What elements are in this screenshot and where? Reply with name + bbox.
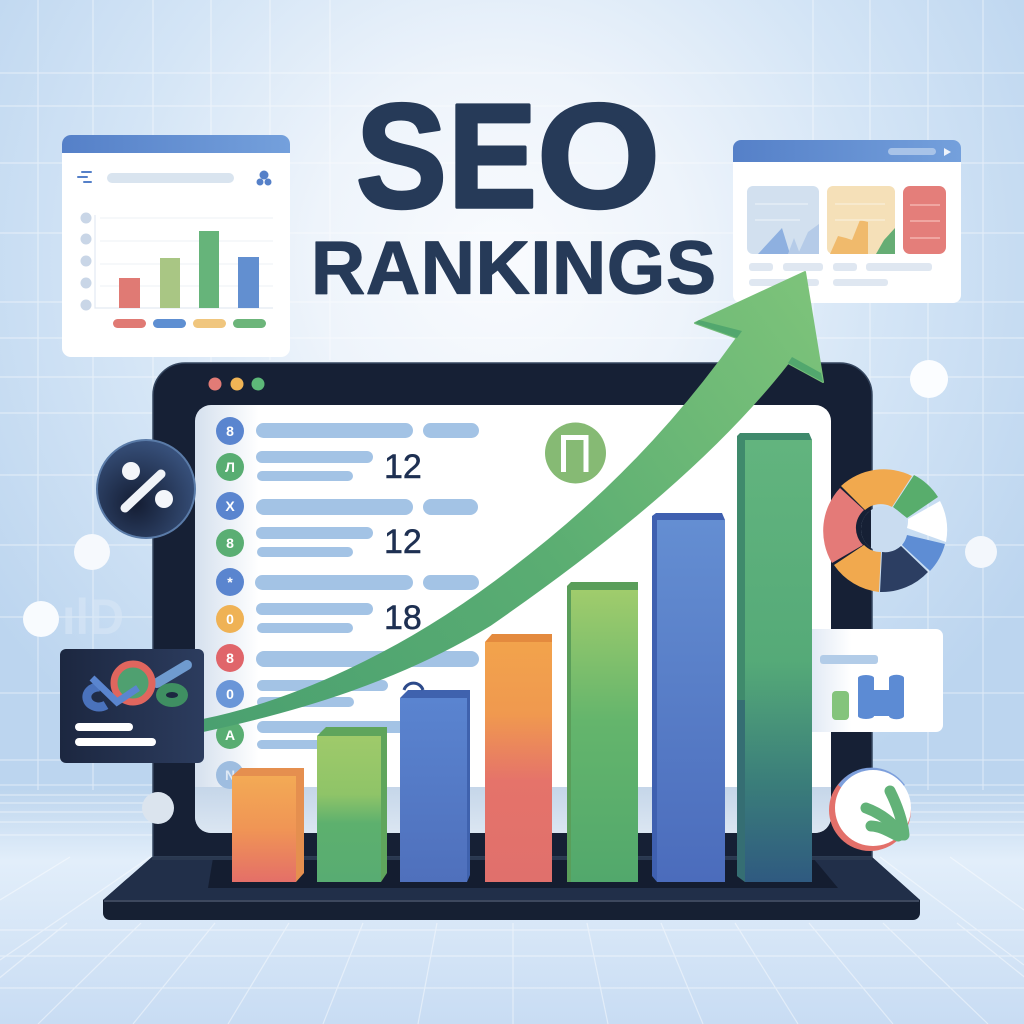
rank numbers: 12 (384, 523, 422, 561)
rank badges: 8 (226, 650, 234, 666)
chart card: red (903, 186, 946, 254)
rank badges: N (225, 767, 235, 783)
icon: green check circle (829, 768, 911, 851)
column 3 (400, 683, 470, 882)
rank badges: 0 (226, 686, 234, 702)
rank badges (216, 417, 244, 789)
bar chart (80, 212, 273, 328)
rank badges: A (225, 727, 235, 743)
column 2 (317, 727, 387, 882)
laptop bezel (153, 363, 872, 857)
orb on laptop edge (142, 792, 174, 824)
rank badges: * (227, 574, 233, 590)
rank numbers: 18 (384, 599, 422, 637)
chart: donut (823, 469, 947, 592)
panel: right dashboard window (733, 140, 961, 303)
rank numbers (384, 448, 422, 637)
ranking list (216, 417, 479, 789)
icon: percent badge (97, 440, 195, 538)
rank badges: Л (225, 459, 235, 475)
chart card: blue (747, 186, 819, 254)
rank badges: 8 (226, 423, 234, 439)
rank badges: X (225, 498, 235, 514)
laptop (103, 363, 920, 920)
list bars (255, 423, 479, 749)
icon: users (256, 170, 272, 186)
heading: SEO: E (448, 74, 537, 239)
window dots (208, 378, 264, 390)
chart card: yellow (827, 186, 895, 254)
card: logo mark (60, 649, 204, 763)
column 7 (737, 433, 812, 882)
screen (195, 405, 831, 833)
column 6 (652, 513, 725, 882)
column 4 (485, 634, 552, 882)
heading: RANKINGS: RANKINGS (311, 226, 716, 310)
heading: SEO: O (537, 74, 660, 239)
icon: menu (78, 172, 91, 182)
icon: play (944, 148, 951, 156)
bar chart: ascending columns (232, 433, 812, 882)
rank numbers: 12 (384, 448, 422, 486)
title (311, 74, 716, 310)
heading: SEO (356, 74, 660, 239)
laptop base (103, 857, 920, 920)
column 5 (567, 582, 638, 882)
rank badges: 8 (226, 535, 234, 551)
rank badges: 0 (226, 611, 234, 627)
panel: small bars card (812, 629, 943, 732)
arrow: rising trend (203, 272, 823, 731)
heading: SEO: S (356, 74, 447, 239)
decorative floating dots (23, 360, 997, 637)
panel: left dashboard window (62, 135, 290, 357)
icon: green logo badge (545, 422, 606, 484)
column 1 (232, 768, 304, 882)
faint ghost label: ılD (62, 589, 124, 645)
